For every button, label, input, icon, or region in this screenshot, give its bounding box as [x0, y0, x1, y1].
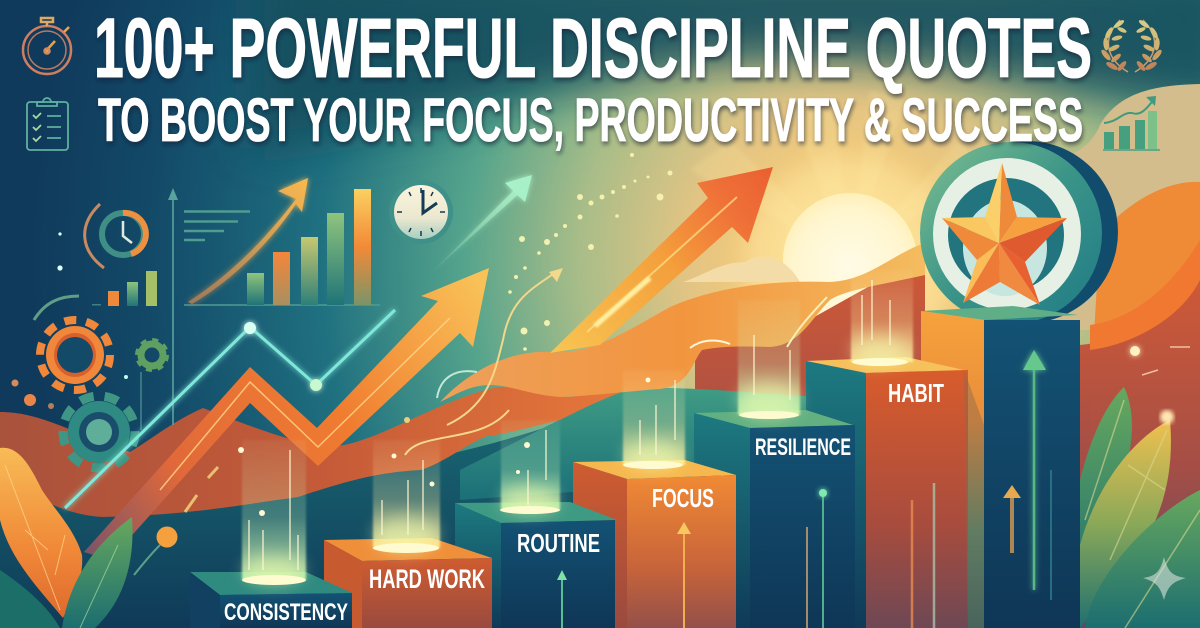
bar: routine — [455, 502, 617, 628]
teal wave under ribbon — [460, 388, 806, 500]
clouds — [613, 257, 800, 357]
arrow: rising chart — [188, 178, 308, 304]
arrow: large rising orange — [550, 167, 773, 353]
sun — [745, 157, 955, 367]
icon: orange gear — [40, 320, 110, 390]
icon: growth chart — [1103, 96, 1160, 150]
arrow: zigzag highlight — [160, 318, 450, 490]
green leaf — [62, 517, 133, 628]
label: consistency: CONSISTENCY — [224, 599, 348, 626]
label: habit: HABIT — [888, 378, 944, 408]
small bars — [34, 232, 157, 320]
wave ribbon red — [0, 385, 640, 517]
icon: stopwatch — [23, 18, 71, 74]
label: hard work: HARD WORK — [369, 564, 485, 594]
icon: teal gear — [63, 396, 135, 468]
arrow: small green rising — [427, 175, 532, 277]
icon: small green gear — [137, 340, 167, 370]
arrow: neon line — [65, 310, 395, 508]
icon: orange ball and stem — [134, 526, 178, 575]
wave ribbon orange — [440, 243, 925, 402]
icon: wall clock — [389, 180, 453, 244]
dark green leaf — [0, 570, 60, 628]
bar: hard work — [324, 538, 492, 628]
bar: resilience — [694, 410, 855, 628]
title — [94, 1, 1092, 154]
bar: consistency — [190, 572, 352, 628]
leaf bottom — [1085, 490, 1200, 628]
icon: clock ring — [85, 204, 146, 268]
icon: clipboard — [27, 98, 68, 150]
icon: laurel wreath — [1100, 19, 1163, 72]
dotted trail — [508, 153, 672, 351]
left branch — [1100, 19, 1128, 72]
arrow: small orange — [1003, 485, 1021, 553]
bar: star pedestal — [921, 306, 1080, 628]
left leaves — [0, 448, 218, 628]
bar: habit — [806, 357, 984, 628]
axis and text lines — [168, 188, 380, 425]
target medallion — [920, 141, 1118, 324]
right leaves — [1080, 346, 1200, 628]
gears — [12, 320, 167, 468]
label: focus: FOCUS — [652, 483, 714, 513]
arrow: tall green — [1023, 350, 1046, 590]
bar: focus — [573, 460, 736, 628]
hills and sun — [613, 84, 1200, 628]
curved sparkle lines — [404, 268, 827, 455]
main bars — [247, 189, 371, 305]
star — [942, 163, 1067, 305]
lower dark ground — [0, 400, 700, 628]
label: resilience: RESILIENCE — [755, 434, 851, 461]
icon: sparkle watermark — [1143, 557, 1186, 600]
arrow: big orange zigzag — [84, 268, 489, 560]
leaf middle — [1080, 420, 1171, 628]
leaf top — [1080, 387, 1132, 600]
glowing beams — [238, 270, 913, 585]
orange leaf — [0, 448, 82, 618]
right branch — [1135, 19, 1163, 72]
label: routine: ROUTINE — [517, 528, 600, 558]
left chart icons — [34, 178, 380, 425]
